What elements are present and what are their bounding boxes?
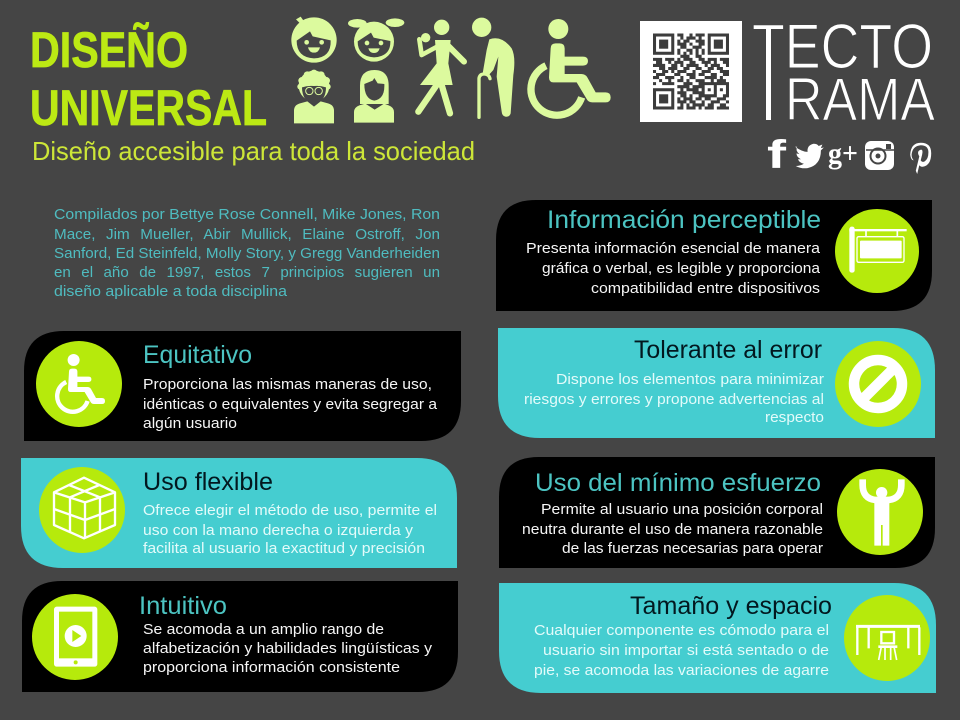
title	[30, 22, 267, 136]
body text: riesgos y errores y propone advertencias al	[524, 391, 824, 408]
icon: wheelchair user	[531, 19, 611, 115]
heading: Tamaño y espacio	[630, 592, 832, 620]
body text: respecto	[765, 409, 824, 426]
body text	[534, 622, 829, 679]
QR code	[640, 21, 742, 122]
icon: boy	[291, 17, 337, 63]
heading: Uso del mínimo esfuerzo	[535, 469, 821, 497]
body text: idénticas o equivalentes y evita segregar a	[143, 396, 438, 413]
heading: Tolerante al error	[634, 336, 822, 364]
icon: woman	[354, 70, 394, 123]
heading: Equitativo	[143, 341, 252, 369]
panel: Tamaño y espacio	[499, 583, 936, 693]
intro text	[54, 207, 440, 300]
icon: elderly with cane	[472, 18, 514, 117]
body text: algún usuario	[143, 415, 237, 432]
logo: Tectorama: RAMA	[785, 66, 935, 133]
intro text: en el año de 1997, estos 7 principios sugieren un	[54, 265, 440, 281]
icon: hanging sign	[835, 209, 919, 293]
intro text: Compilados por Bettye Rose Connell, Mike Jones, Ron	[54, 207, 440, 223]
icon: table and chair	[844, 595, 930, 681]
panel: Uso del mínimo esfuerzo	[499, 457, 935, 568]
icon: facebook: f	[767, 133, 787, 177]
intro text: Sanford, Ed Steinfeld, Molly Story, y Gregg Vanderheiden	[54, 246, 440, 262]
body text: neutra durante el uso de manera razonable	[522, 521, 823, 538]
icon: prohibited sign	[835, 341, 921, 427]
body text	[522, 501, 823, 557]
heading: Uso flexible	[143, 468, 273, 496]
body text: Dispone los elementos para minimizar	[556, 371, 824, 388]
icon: tablet	[32, 594, 118, 680]
icon: google plus: g+	[828, 137, 858, 170]
icon: instagram	[865, 141, 894, 170]
body text	[143, 376, 438, 432]
panel: Tolerante al error	[498, 328, 935, 438]
icons: people	[291, 17, 611, 123]
body text: Permite al usuario una posición corporal	[541, 501, 823, 518]
body text: proporciona información consistente	[143, 659, 400, 676]
icon: person with raised arms	[837, 469, 923, 555]
body text: gráfica o verbal, es legible y proporciona	[542, 260, 821, 277]
social icons	[767, 133, 931, 177]
panel: Información perceptible	[496, 200, 932, 311]
panel: Uso flexible	[21, 458, 457, 568]
icon: pinterest	[910, 143, 931, 174]
panel: Intuitivo	[22, 581, 458, 692]
body text: pie, se acomoda las variaciones de agarre	[534, 662, 829, 679]
body text	[143, 502, 437, 557]
logo: Tectorama	[752, 12, 935, 133]
icon: twitter	[795, 144, 824, 168]
icon: girl	[348, 18, 404, 62]
icon: cube	[39, 467, 125, 553]
heading: Información perceptible	[547, 206, 821, 234]
logo: Tectorama: TECTO	[752, 12, 933, 82]
body text: uso con la mano derecha o izquierda y	[143, 522, 414, 539]
icon: wheelchair	[36, 341, 122, 427]
intro text: Mace, Jim Mueller, Abir Mullick, Elaine Ostroff, Jon	[54, 227, 440, 243]
body text	[524, 371, 824, 426]
icon: mother with baby	[418, 20, 464, 113]
icon: boy with glasses	[294, 70, 334, 123]
body text: Se acomoda a un amplio rango de	[143, 621, 384, 638]
subtitle: Diseño accesible para toda la sociedad	[32, 136, 475, 166]
intro text: diseño aplicable a toda disciplina	[54, 284, 288, 300]
panel: Equitativo	[24, 331, 461, 441]
body text: Proporciona las mismas maneras de uso,	[143, 376, 432, 393]
body text: compatibilidad entre dispositivos	[591, 280, 820, 297]
body text: facilita al usuario la exactitud y precisión	[143, 540, 425, 557]
body text: de las fuerzas necesarias para operar	[562, 540, 823, 557]
heading: Intuitivo	[139, 592, 227, 620]
body text	[143, 621, 433, 676]
body text	[526, 240, 821, 297]
body text: Cualquier componente es cómodo para el	[534, 622, 829, 639]
body text: Ofrece elegir el método de uso, permite el	[143, 502, 437, 519]
body text: alfabetización y habilidades lingüísticas y	[143, 640, 433, 657]
body text: Presenta información esencial de manera	[526, 240, 821, 257]
title: DISEÑO	[30, 22, 188, 78]
title: UNIVERSAL	[30, 80, 267, 136]
body text: usuario sin importar si está sentado o de	[543, 642, 829, 659]
